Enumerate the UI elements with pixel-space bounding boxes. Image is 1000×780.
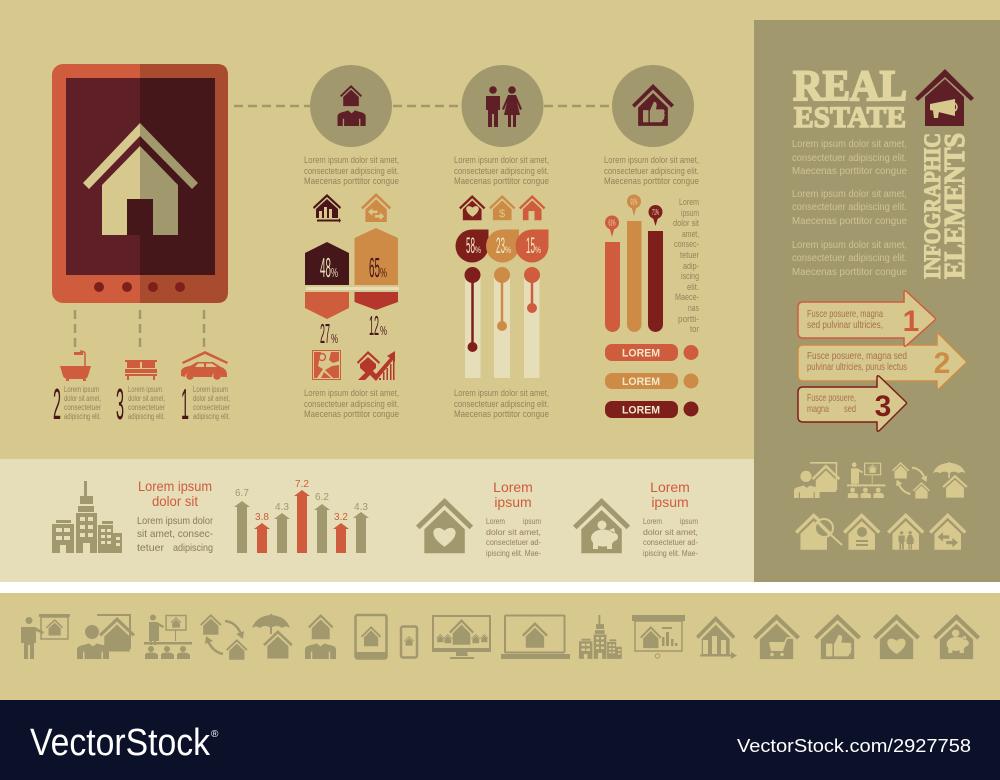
sidebar text blocks: Maecenas porttitor congue xyxy=(792,266,907,278)
icon: house chart xyxy=(313,194,341,223)
panel: right sidebar background xyxy=(754,20,1000,582)
arrow 1: 1 xyxy=(903,305,919,338)
bar 6.2: 6.2 xyxy=(315,492,329,503)
icon: presentation xyxy=(847,462,885,498)
icon: city building xyxy=(52,481,122,553)
right-aligned text block: nas xyxy=(688,303,699,314)
right-aligned text block: consec- xyxy=(674,239,699,250)
icon: exchange cycle xyxy=(892,462,930,499)
icon row: sidebar icons xyxy=(794,462,968,550)
panel: column 2 xyxy=(454,65,549,420)
bar chart: 91% xyxy=(630,198,638,206)
icon: cart house xyxy=(753,614,800,659)
sidebar text blocks: Lorem ipsum dolor sit amet, xyxy=(792,239,907,251)
right-aligned text block: dolor sit xyxy=(673,218,699,229)
right-aligned text block: tor xyxy=(690,324,699,335)
icon: phone xyxy=(401,626,417,658)
legend item 3: LOREM xyxy=(622,404,660,416)
stat: 58%: 58 xyxy=(466,233,475,258)
icon: agent with frame xyxy=(77,615,135,659)
bar 3.8: 3.8 xyxy=(255,512,269,523)
stat: 15%: 15 xyxy=(526,233,535,258)
panel: column 3 xyxy=(604,65,699,418)
heading: Real Estate xyxy=(793,63,907,134)
text block: Lorem ipsum dolor sit amet, xyxy=(454,155,549,166)
arrow 2 xyxy=(798,334,966,389)
icon: presentation to audience xyxy=(144,614,192,659)
footer bar xyxy=(0,700,1000,780)
text block: consectetuer adipiscing elit. xyxy=(454,166,549,177)
arrow 3: magna xyxy=(807,403,829,415)
legend item 2 xyxy=(605,373,698,389)
icon: bathtub with text 2: adipiscing elit. xyxy=(64,412,101,421)
text block: consectetuer adipiscing elit. xyxy=(604,166,699,177)
icon: bed with text 3: adipiscing elit. xyxy=(128,412,165,421)
arrow 1 xyxy=(798,291,936,346)
text block: Lorem xyxy=(643,517,662,526)
icon: home house xyxy=(519,195,545,221)
text block: Maecenas porttitor congue xyxy=(604,176,699,187)
icon: bed with text 3 xyxy=(116,360,165,429)
text block: dolor sit amet, xyxy=(486,528,541,537)
text block: Maecenas porttitor congue xyxy=(454,176,549,187)
stat: 23%: % xyxy=(505,245,511,255)
heading: Infographic Elements xyxy=(920,133,971,279)
stat: 48% xyxy=(305,242,349,285)
icon: presentation board xyxy=(632,615,685,658)
icon: piggy bank house xyxy=(933,614,980,659)
icon: car under roof with text 1: dolor sit amet, xyxy=(193,394,230,403)
bar 6.7: 6.7 xyxy=(235,488,249,499)
icon: couple house xyxy=(887,513,924,550)
sidebar text blocks: Maecenas porttitor congue xyxy=(792,215,907,227)
text block: consectetuer ad- xyxy=(643,538,698,547)
text block: ipsum xyxy=(680,517,698,526)
icon: bed with text 3: consectetuer xyxy=(128,403,165,412)
heading: Lorem ipsum: Lorem xyxy=(493,479,533,495)
heading: Lorem ipsum: ipsum xyxy=(651,494,689,510)
icon: heart house xyxy=(416,498,473,553)
text block xyxy=(304,155,399,187)
sidebar text blocks: Maecenas porttitor congue xyxy=(792,165,907,177)
icon: insurance umbrella xyxy=(933,462,968,498)
right-aligned text block: tetuer xyxy=(680,250,699,261)
icon: car under roof with text 1: consectetuer xyxy=(193,403,230,412)
stat drops xyxy=(456,230,548,262)
text block: consectetuer ad- xyxy=(486,538,541,547)
bar 7.2: 7.2 xyxy=(295,479,309,490)
icon: bathtub with text 2: consectetuer xyxy=(64,403,101,412)
icon: car under roof with text 1 xyxy=(181,351,230,429)
icon: monitor xyxy=(432,615,491,659)
icon: house-head agent xyxy=(305,614,336,659)
arrow 1: sed pulvinar ultricies, xyxy=(807,319,883,331)
text block: Lorem xyxy=(486,517,505,526)
footer logo: VectorStock: ® xyxy=(211,729,219,740)
bar chart: 71% xyxy=(652,208,659,217)
sidebar text blocks: Lorem ipsum dolor sit amet, xyxy=(792,188,907,200)
stat: 27% xyxy=(305,292,349,349)
icon: car under roof with text 1: 1 xyxy=(181,380,189,429)
text block: sit amet, consec- xyxy=(137,528,213,540)
arrow 2: pulvinar ultricies, purus lectus xyxy=(807,361,907,373)
text block xyxy=(454,155,549,187)
text block xyxy=(454,388,549,420)
icon: exchange cycle xyxy=(200,614,248,660)
slider 2 xyxy=(494,267,510,378)
heading: Infographic Elements: ELEMENTS xyxy=(939,133,971,279)
stat: 12%: % xyxy=(380,323,387,338)
heading: Real Estate: REAL xyxy=(793,63,907,110)
icon: house chart xyxy=(696,616,737,659)
bar 3.2: 3.2 xyxy=(334,512,348,523)
legend item 3 xyxy=(605,401,698,418)
text block: dolor sit amet, xyxy=(643,528,698,537)
icon: city xyxy=(579,615,622,659)
stat: 15% xyxy=(516,230,548,262)
stat: 48%: 48 xyxy=(320,252,331,283)
icon row: bottom strip xyxy=(21,614,980,660)
heading: Lorem ipsum xyxy=(493,479,533,510)
icon: insurance umbrella xyxy=(252,614,293,659)
icon: heart house xyxy=(873,614,920,659)
text block xyxy=(643,517,698,558)
bar chart: 61% xyxy=(608,218,616,228)
heading: Lorem ipsum xyxy=(650,479,690,510)
icon: bathtub with text 2 xyxy=(53,351,101,429)
icon: swap house xyxy=(929,513,966,550)
icon: bathtub with text 2: dolor sit amet, xyxy=(64,394,101,403)
arrow 2: 2 xyxy=(934,347,950,380)
right-aligned text block: amet, xyxy=(682,229,699,240)
right-aligned text block: iscing xyxy=(681,271,699,282)
sidebar text blocks: Lorem ipsum dolor sit amet, xyxy=(792,138,907,150)
text block: consectetuer adipiscing elit. xyxy=(304,166,399,177)
icon: presenter with board xyxy=(21,614,70,659)
stat: 12% xyxy=(354,292,398,341)
icon: megaphone house xyxy=(915,69,974,126)
text block: Maecenas porttitor congue xyxy=(454,409,549,420)
right-aligned text block: ipsum xyxy=(681,208,699,219)
heading: Lorem ipsum: Lorem xyxy=(650,479,690,495)
arrow 3 xyxy=(798,376,906,431)
icon: dollar house xyxy=(843,513,880,550)
arrow 3: Fusce posuere, xyxy=(807,392,856,404)
stat: 27%: % xyxy=(331,331,338,346)
icon: search house xyxy=(795,513,842,550)
text block: tetuer xyxy=(137,542,164,554)
text block: consectetuer adipiscing elit. xyxy=(304,399,399,410)
sidebar text blocks: consectetuer adipiscing elit. xyxy=(792,252,907,264)
panel: column 1 xyxy=(304,65,399,420)
heading: Lorem ipsum dolor sit xyxy=(138,478,212,509)
text block xyxy=(604,155,699,187)
stat: 23%: 23 xyxy=(496,233,505,258)
icon: bathtub with text 2: Lorem ipsum xyxy=(64,385,99,394)
right-aligned text block: elit. xyxy=(687,282,699,293)
icon: growth chart house xyxy=(357,351,395,381)
icon: map xyxy=(312,350,340,380)
icon: tablet xyxy=(356,615,386,658)
icon: thumbs-up house circle xyxy=(612,65,694,147)
icon: bed with text 3: 3 xyxy=(116,380,124,429)
stat: 65%: 65 xyxy=(369,252,380,283)
heading: Infographic Elements: INFOGRAPHIC xyxy=(920,133,945,279)
icon: thumbs-up house xyxy=(814,614,861,659)
bar chart xyxy=(605,194,663,332)
icon: heart house xyxy=(459,195,485,220)
text block: Lorem ipsum dolor xyxy=(137,515,213,527)
icon: laptop xyxy=(501,616,570,659)
slider 3 xyxy=(524,267,540,378)
icon: agent with frame xyxy=(794,463,840,498)
text block: ipiscing elit. Mae- xyxy=(486,549,541,558)
arrow 1: Fusce posuere, magna xyxy=(807,308,883,320)
right-aligned text block: Lorem xyxy=(679,197,699,208)
icon: agent circle xyxy=(310,65,392,147)
bar 4.3: 4.3 xyxy=(275,502,289,513)
heading: Lorem ipsum dolor sit: Lorem ipsum xyxy=(138,478,212,494)
right-aligned text block: portti- xyxy=(678,314,699,325)
stat: 65% xyxy=(354,228,398,285)
icon: car under roof with text 1: adipiscing elit. xyxy=(193,412,230,421)
stat: 23% xyxy=(486,230,519,262)
text block: Maecenas porttitor congue xyxy=(304,176,399,187)
icon: dollar house xyxy=(489,195,515,220)
icon: piggy bank house xyxy=(573,498,630,553)
text block: adipiscing xyxy=(173,542,213,554)
text block xyxy=(137,515,213,554)
heading: Real Estate: ESTATE xyxy=(794,101,906,134)
icon: bed with text 3: Lorem ipsum xyxy=(128,385,162,394)
bar chart: arrows xyxy=(234,479,369,553)
text block: Maecenas porttitor congue xyxy=(304,409,399,420)
sidebar text blocks: consectetuer adipiscing elit. xyxy=(792,201,907,213)
icon: swap house xyxy=(361,193,391,222)
text block: Lorem ipsum dolor sit amet, xyxy=(454,388,549,399)
tablet with home icon xyxy=(52,64,228,303)
bar 4.3: 4.3 xyxy=(354,502,368,513)
icon: dollar house: $ xyxy=(499,208,505,220)
footer logo: VectorStock: VectorStock xyxy=(30,722,211,764)
icon: couple circle xyxy=(462,65,544,147)
icon: bathtub with text 2: 2 xyxy=(53,380,61,429)
legend item 2: LOREM xyxy=(622,376,660,388)
text block xyxy=(304,388,399,420)
text block: ipsum xyxy=(523,517,541,526)
stat: 65%: % xyxy=(380,265,387,280)
right-aligned text block: adip- xyxy=(683,261,699,272)
text block: consectetuer adipiscing elit. xyxy=(454,399,549,410)
arrow 3: 3 xyxy=(875,390,891,423)
arrow 3: sed xyxy=(844,403,856,415)
footer url: VectorStock.com/2927758 xyxy=(737,736,971,756)
legend item 1: LOREM xyxy=(622,348,660,360)
sidebar text blocks xyxy=(792,138,907,278)
icon: bed with text 3: dolor sit amet, xyxy=(128,394,165,403)
heading: Lorem ipsum: ipsum xyxy=(494,494,532,510)
arrow 2: Fusce posuere, magna sed xyxy=(807,350,907,362)
legend item 1 xyxy=(605,344,698,361)
stat: 48%: % xyxy=(331,265,338,280)
stat: 15%: % xyxy=(535,245,541,255)
stat: 58%: % xyxy=(475,245,481,255)
text block: Lorem ipsum dolor sit amet, xyxy=(304,155,399,166)
right-aligned text block xyxy=(673,197,699,335)
light band xyxy=(0,459,754,582)
slider 1 xyxy=(464,267,480,378)
text block: ipiscing elit. Mae- xyxy=(643,549,698,558)
sidebar text blocks: consectetuer adipiscing elit. xyxy=(792,152,907,164)
icon: car under roof with text 1: Lorem ipsum xyxy=(193,385,228,394)
stat: 12%: 12 xyxy=(369,310,379,341)
text block: Lorem ipsum dolor sit amet, xyxy=(604,155,699,166)
right-aligned text block: Maece- xyxy=(675,292,699,303)
text block xyxy=(486,517,541,558)
text block: Lorem ipsum dolor sit amet, xyxy=(304,388,399,399)
stat: 27%: 27 xyxy=(320,318,330,349)
white divider stripe xyxy=(0,582,1000,593)
stat: 58% xyxy=(456,230,488,262)
heading: Lorem ipsum dolor sit: dolor sit xyxy=(152,493,198,509)
connector dashes xyxy=(75,106,612,348)
